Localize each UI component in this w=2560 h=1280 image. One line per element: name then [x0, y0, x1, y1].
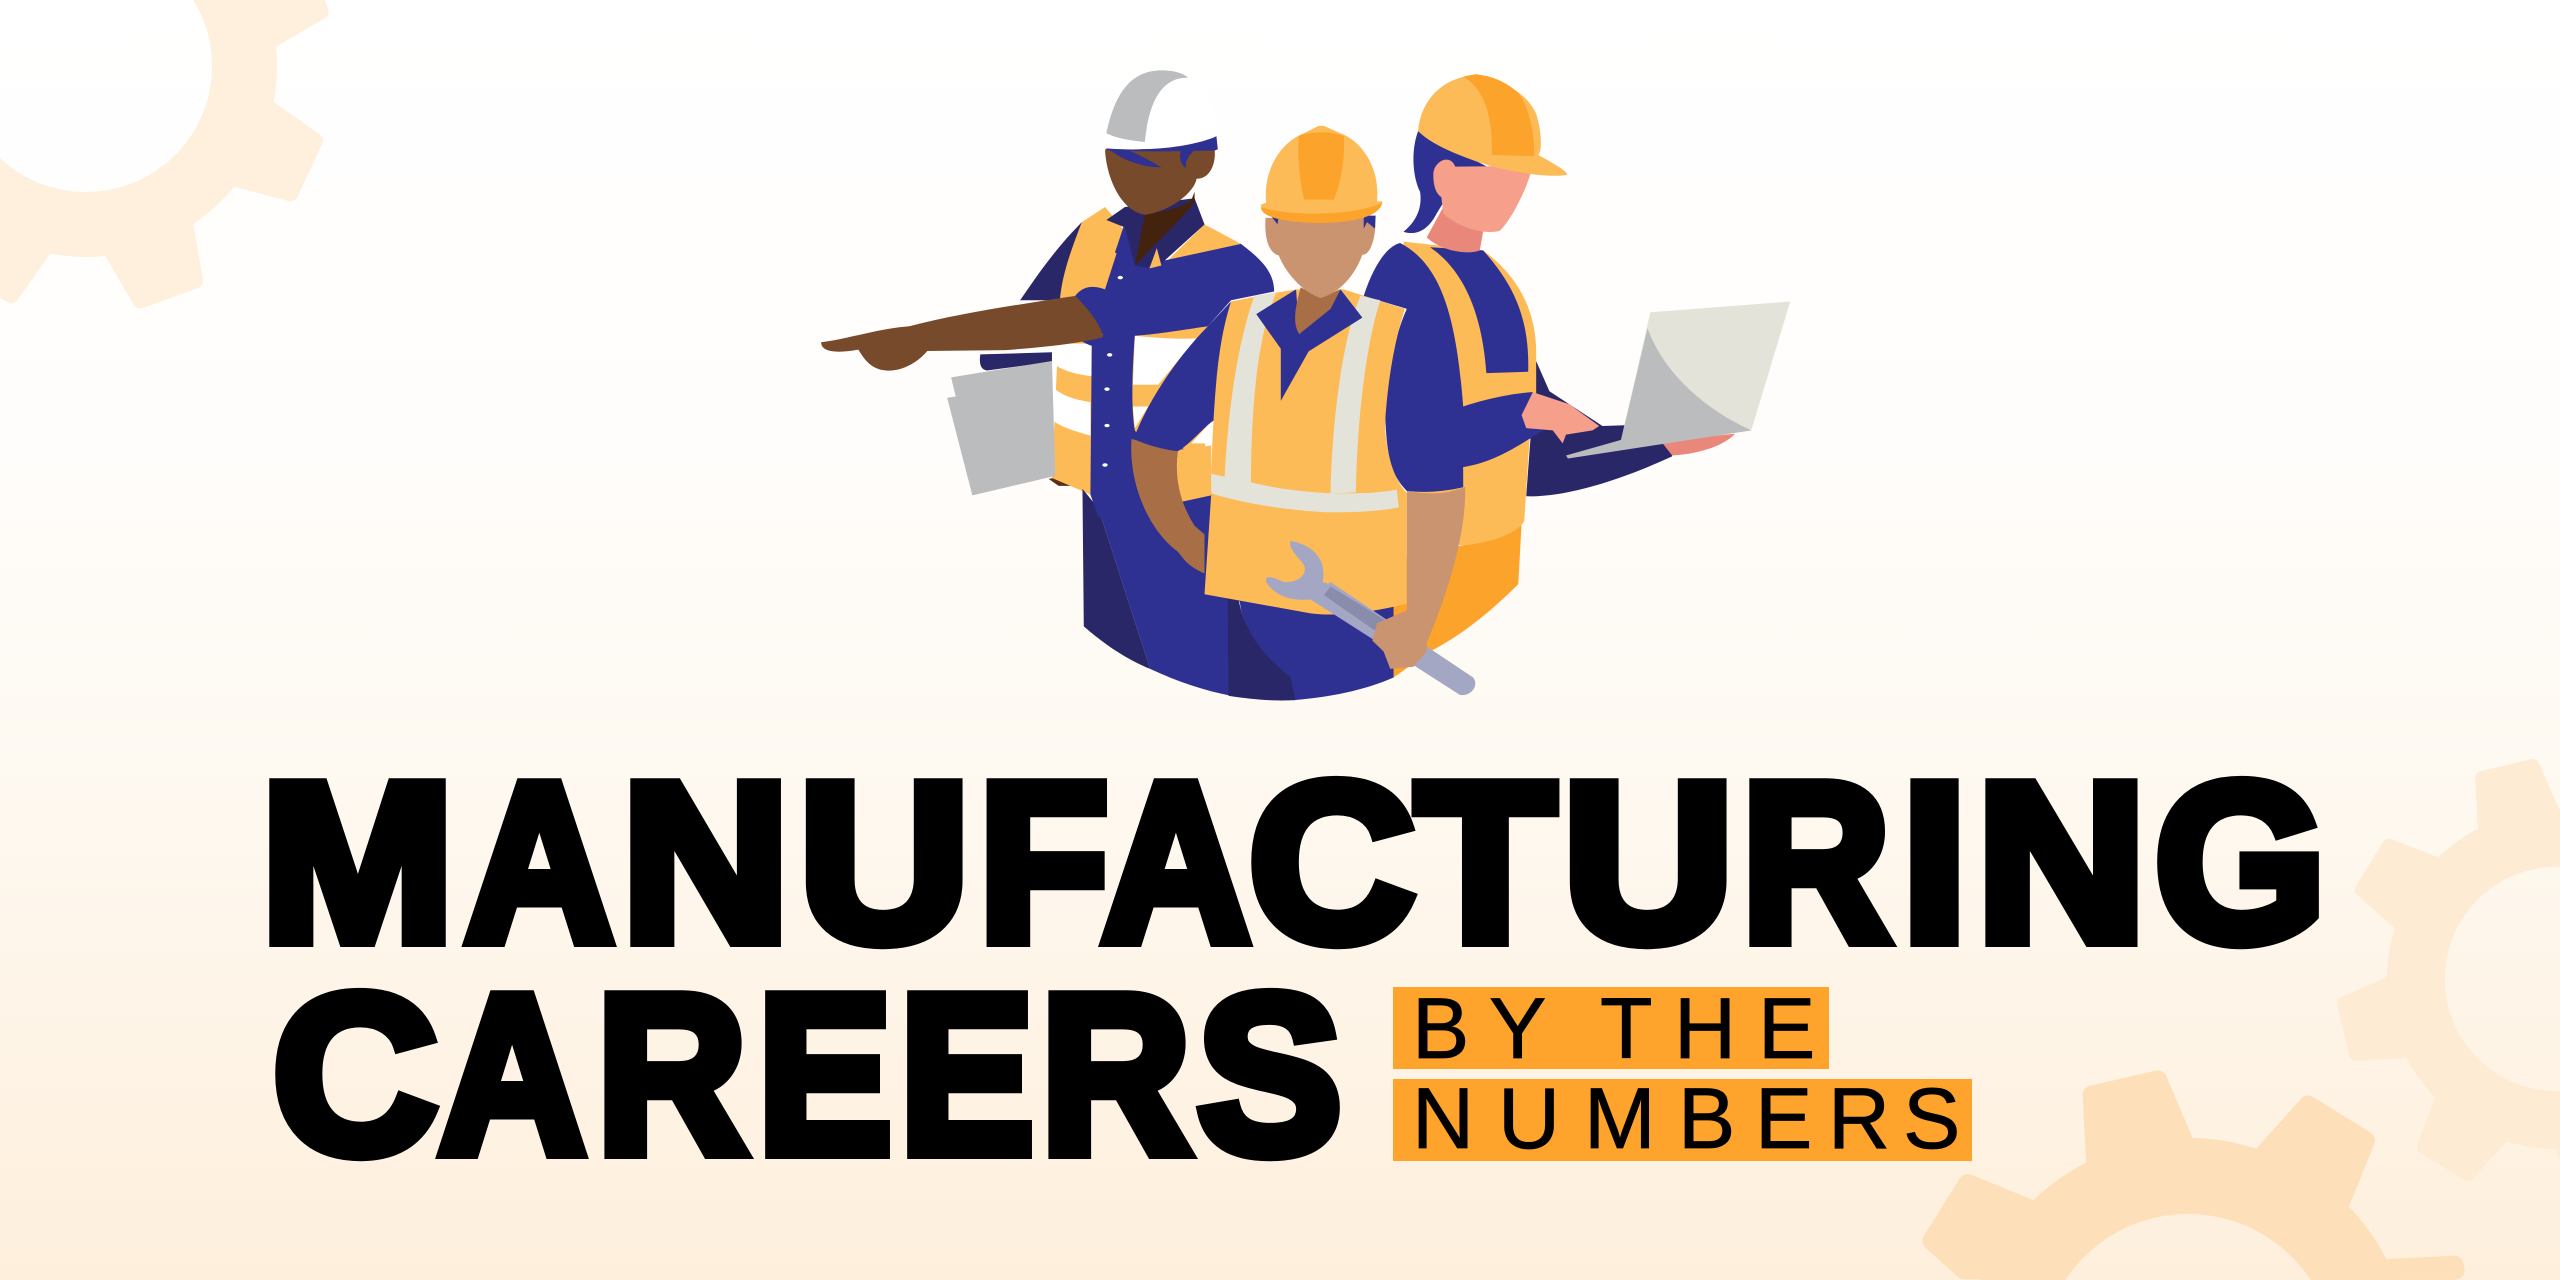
worker: man on left, head and helmet	[1105, 70, 1218, 269]
title line 2: A	[439, 949, 585, 1200]
title line 1: I	[1902, 736, 1967, 988]
title line 1: N	[622, 737, 789, 988]
worker: woman, back arm and lower body	[1377, 242, 1735, 678]
title line 1: G	[2155, 737, 2326, 989]
worker: middle man, head and helmet	[1261, 126, 1382, 298]
badge: BY THE: BY THE	[1412, 981, 1815, 1077]
title line 2: R	[597, 948, 746, 1200]
clipboard	[947, 361, 1055, 495]
worker: middle man, forearm and hand	[1372, 487, 1465, 669]
title line 2: E	[900, 949, 1034, 1201]
title line 1: T	[1416, 736, 1555, 988]
title line 2: S	[1198, 948, 1342, 1200]
title line 2: C	[273, 948, 437, 1200]
title line 1: U	[799, 736, 970, 988]
badge: NUMBERS: NUMBERS	[1412, 1071, 1960, 1167]
worker: middle man, body and vest	[1131, 287, 1407, 700]
laptop	[1566, 302, 1790, 459]
title line 2	[273, 948, 1342, 1201]
title line 1: A	[465, 736, 613, 988]
title line 1: M	[261, 737, 454, 988]
title line 2: R	[1041, 948, 1190, 1200]
gear: top left	[0, 0, 404, 384]
illustration: three construction workers	[821, 70, 1790, 700]
title line 1: C	[1249, 737, 1415, 989]
title line 1: N	[1977, 736, 2146, 988]
title	[261, 736, 2326, 1201]
title line 1: U	[1563, 736, 1734, 988]
worker: man on left, shirt and pointing arm	[821, 224, 1274, 467]
title line 2: E	[758, 949, 892, 1201]
title line 1: R	[1742, 736, 1890, 988]
wrench	[1266, 541, 1475, 695]
title line 1	[261, 736, 2326, 989]
worker: woman, head, helmet, arm	[1364, 74, 1599, 545]
title line 1: A	[1102, 736, 1250, 988]
gear: right	[2264, 686, 2560, 1272]
gear: bottom	[1932, 1080, 2455, 1280]
worker: man on left, back	[980, 207, 1241, 696]
title line 1: F	[979, 737, 1108, 988]
